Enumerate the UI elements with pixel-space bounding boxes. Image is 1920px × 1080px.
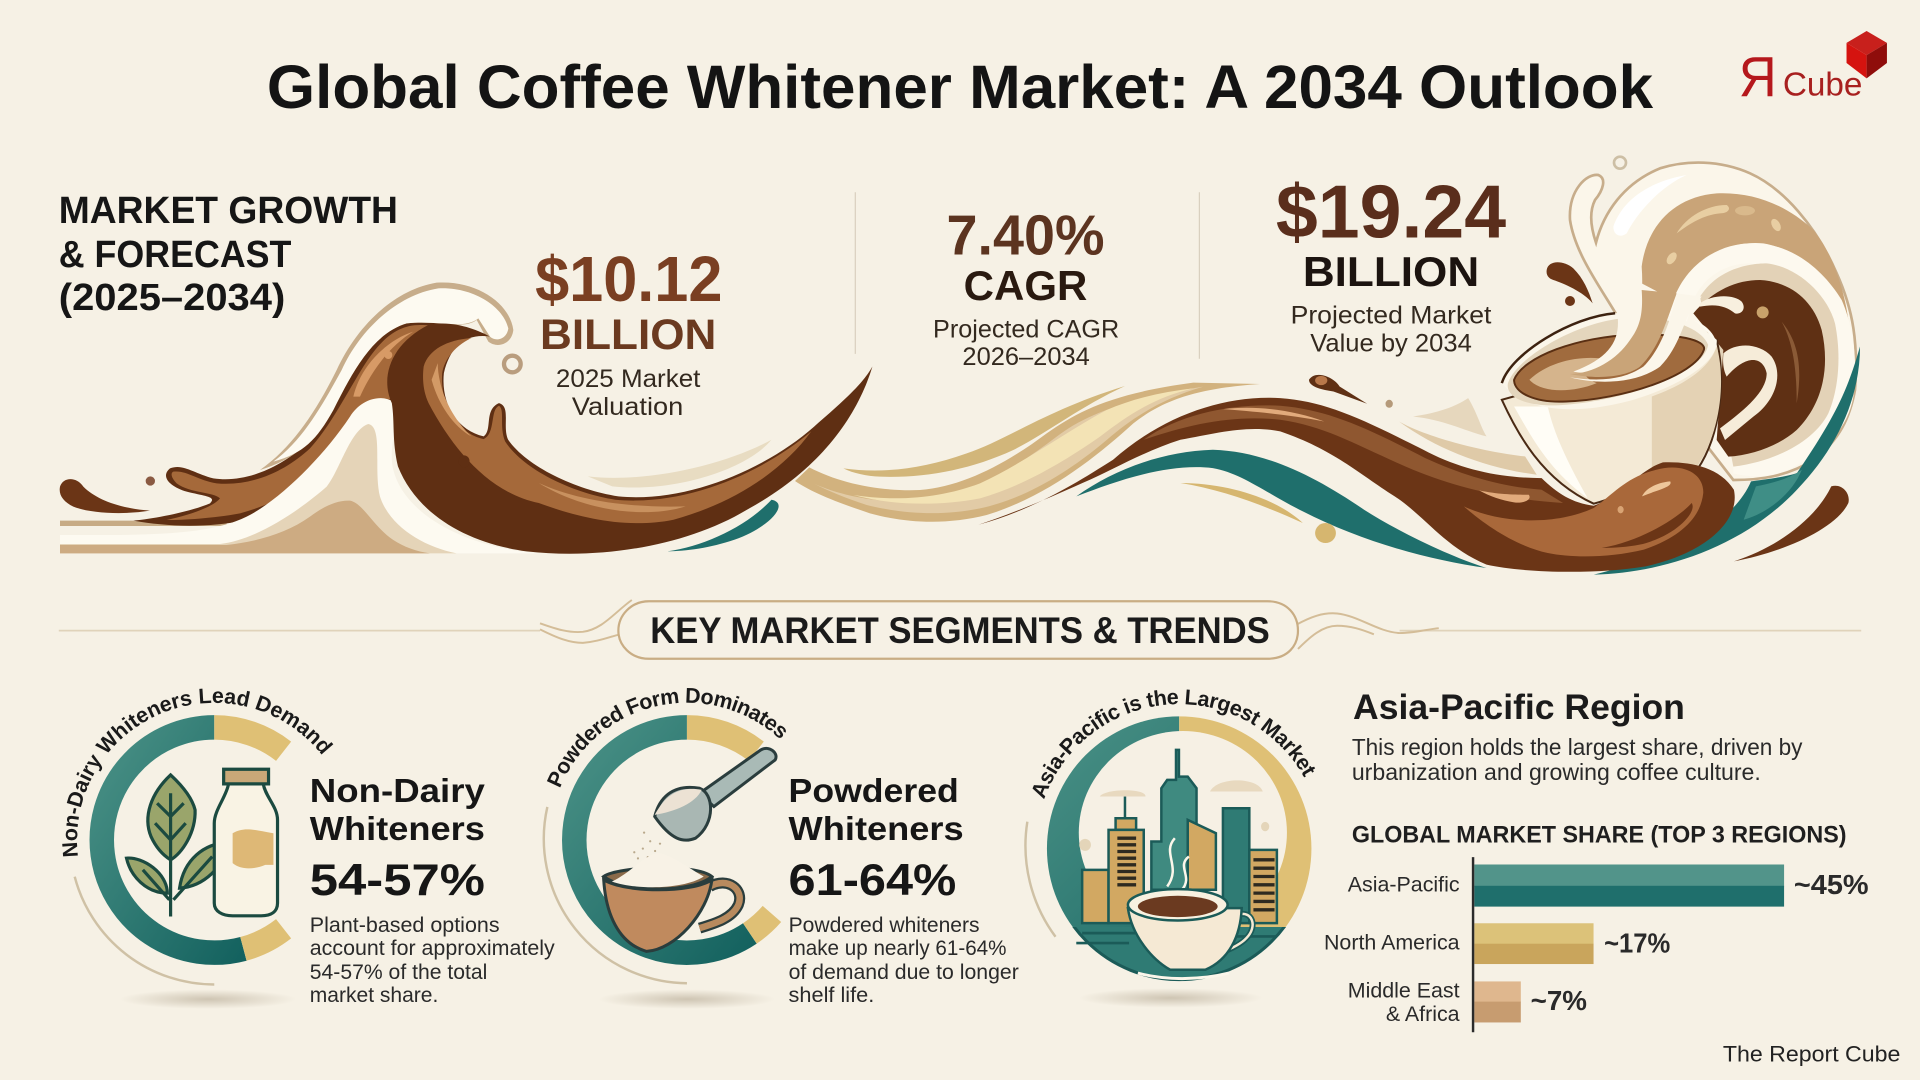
stat: CAGR <box>933 204 1119 371</box>
icon: falling powder <box>633 832 661 859</box>
icon: leaves <box>127 775 229 916</box>
bar: north america: North America <box>1324 931 1460 955</box>
bar: north america: ~17% <box>1604 928 1670 959</box>
stat: CAGR: 2026–2034 <box>962 343 1090 371</box>
stat: 2034 projected value: Value by 2034 <box>1310 329 1472 357</box>
bar: asia-pacific: ~45% <box>1794 869 1869 900</box>
heading: market growth and forecast: & FORECAST <box>59 234 291 276</box>
thin arc <box>1025 822 1056 937</box>
icon: cup with powder <box>604 853 740 951</box>
stat: 2034 projected value: $19.24 <box>1276 170 1507 254</box>
footer credit: The Report Cube <box>1723 1042 1900 1067</box>
stat: 2025 market valuation <box>535 244 722 421</box>
icon: bottle <box>214 769 278 916</box>
description: Powdered whiteners <box>789 913 980 937</box>
icon: coffee cup <box>1128 889 1253 979</box>
panel: asia-pacific region text: This region holds the largest share, driven by <box>1352 734 1803 760</box>
heading: market growth and forecast: (2025–2034) <box>59 277 285 319</box>
cup <box>1502 312 1721 504</box>
bar chart: global market share <box>1324 821 1869 1032</box>
heading: market growth and forecast: MARKET GROWTH <box>59 190 398 232</box>
curved heading: Non-Dairy Whiteners Lead Demand <box>62 688 334 856</box>
stat: 2025 market valuation: 2025 Market <box>556 365 700 393</box>
description: make up nearly 61-64% <box>789 936 1007 960</box>
curved heading: Asia-Pacific is the Largest Market <box>1032 690 1316 800</box>
stat: 2034 projected value: BILLION <box>1303 248 1479 295</box>
bar: middle east and africa: ~7% <box>1531 985 1587 1016</box>
bar: middle east and africa: & Africa <box>1386 1002 1460 1026</box>
shadow <box>599 989 775 1009</box>
title: Global Coffee Whitener Market: A 2034 Outlook <box>267 53 1654 121</box>
chart title: GLOBAL MARKET SHARE (TOP 3 REGIONS) <box>1352 821 1847 848</box>
label: Non-Dairy <box>310 773 486 810</box>
logo: RCube: Cube <box>1783 67 1862 104</box>
description <box>310 913 555 1007</box>
description: shelf life. <box>789 983 874 1007</box>
bar: north america <box>1324 923 1670 964</box>
donut ring <box>102 727 284 953</box>
logo: RCube <box>1739 31 1887 108</box>
section header: key market segments and trends: KEY MARKET SEGMENTS & TRENDS <box>650 610 1270 651</box>
stat: 2025 market valuation: BILLION <box>540 311 716 359</box>
stat: CAGR: Projected CAGR <box>933 315 1119 343</box>
label: Whiteners <box>789 811 964 848</box>
description: Plant-based options <box>310 913 500 937</box>
illustration: left coffee wave <box>60 282 872 554</box>
section header: key market segments and trends <box>59 600 1861 659</box>
stat: 2025 market valuation: Valuation <box>572 393 683 421</box>
stat: CAGR: CAGR <box>964 262 1087 309</box>
shadow <box>1079 988 1262 1008</box>
panel: non-dairy whiteners <box>62 688 555 1008</box>
axis <box>1472 857 1474 1032</box>
curved heading: Powdered Form Dominates <box>546 688 786 788</box>
panel: asia-pacific region text <box>1352 687 1803 785</box>
description: 54-57% of the total <box>310 960 487 984</box>
stat: 2034 projected value <box>1276 170 1507 357</box>
icon: city skyline <box>1076 750 1277 943</box>
label: Powdered <box>789 773 959 810</box>
stat: 2025 market valuation: $10.12 <box>535 244 722 315</box>
panel: powdered whiteners <box>542 688 1019 1008</box>
milk swirl behind cup <box>1547 157 1856 480</box>
heading: market growth and forecast <box>59 190 398 319</box>
panel: asia-pacific region text: urbanization and growing coffee culture. <box>1352 759 1761 785</box>
description: market share. <box>310 983 438 1007</box>
donut ring <box>1047 716 1311 981</box>
logo: RCube: Я <box>1739 45 1777 108</box>
illustration: middle golden swoosh <box>795 383 1260 522</box>
coffee ribbon <box>978 398 1735 572</box>
description <box>789 913 1019 1007</box>
stat: CAGR: 7.40% <box>947 204 1104 267</box>
icon: scoop <box>655 748 776 840</box>
thin arc <box>75 877 214 984</box>
percentage: 54-57% <box>310 856 485 905</box>
panel: asia-pacific region text: Asia-Pacific Region <box>1353 687 1685 727</box>
donut ring <box>574 727 772 953</box>
label: Whiteners <box>310 811 485 848</box>
stat: 2034 projected value: Projected Market <box>1291 301 1491 329</box>
description: of demand due to longer <box>789 960 1019 984</box>
panel: asia-pacific largest market <box>1024 690 1316 1006</box>
divider <box>855 192 856 354</box>
bar: asia-pacific: Asia-Pacific <box>1348 872 1460 896</box>
thin arc <box>544 807 687 983</box>
description: account for approximately <box>310 936 555 960</box>
shadow <box>120 989 296 1009</box>
illustration: right coffee wave and cup <box>978 157 1860 575</box>
teal wave and small splashes <box>1076 347 1860 575</box>
bar: asia-pacific <box>1348 864 1869 907</box>
divider <box>1199 192 1200 359</box>
milk stream into cup <box>1570 283 1717 382</box>
percentage: 61-64% <box>789 856 956 905</box>
bar: middle east and africa <box>1348 978 1587 1026</box>
bar: middle east and africa: Middle East <box>1348 978 1460 1002</box>
